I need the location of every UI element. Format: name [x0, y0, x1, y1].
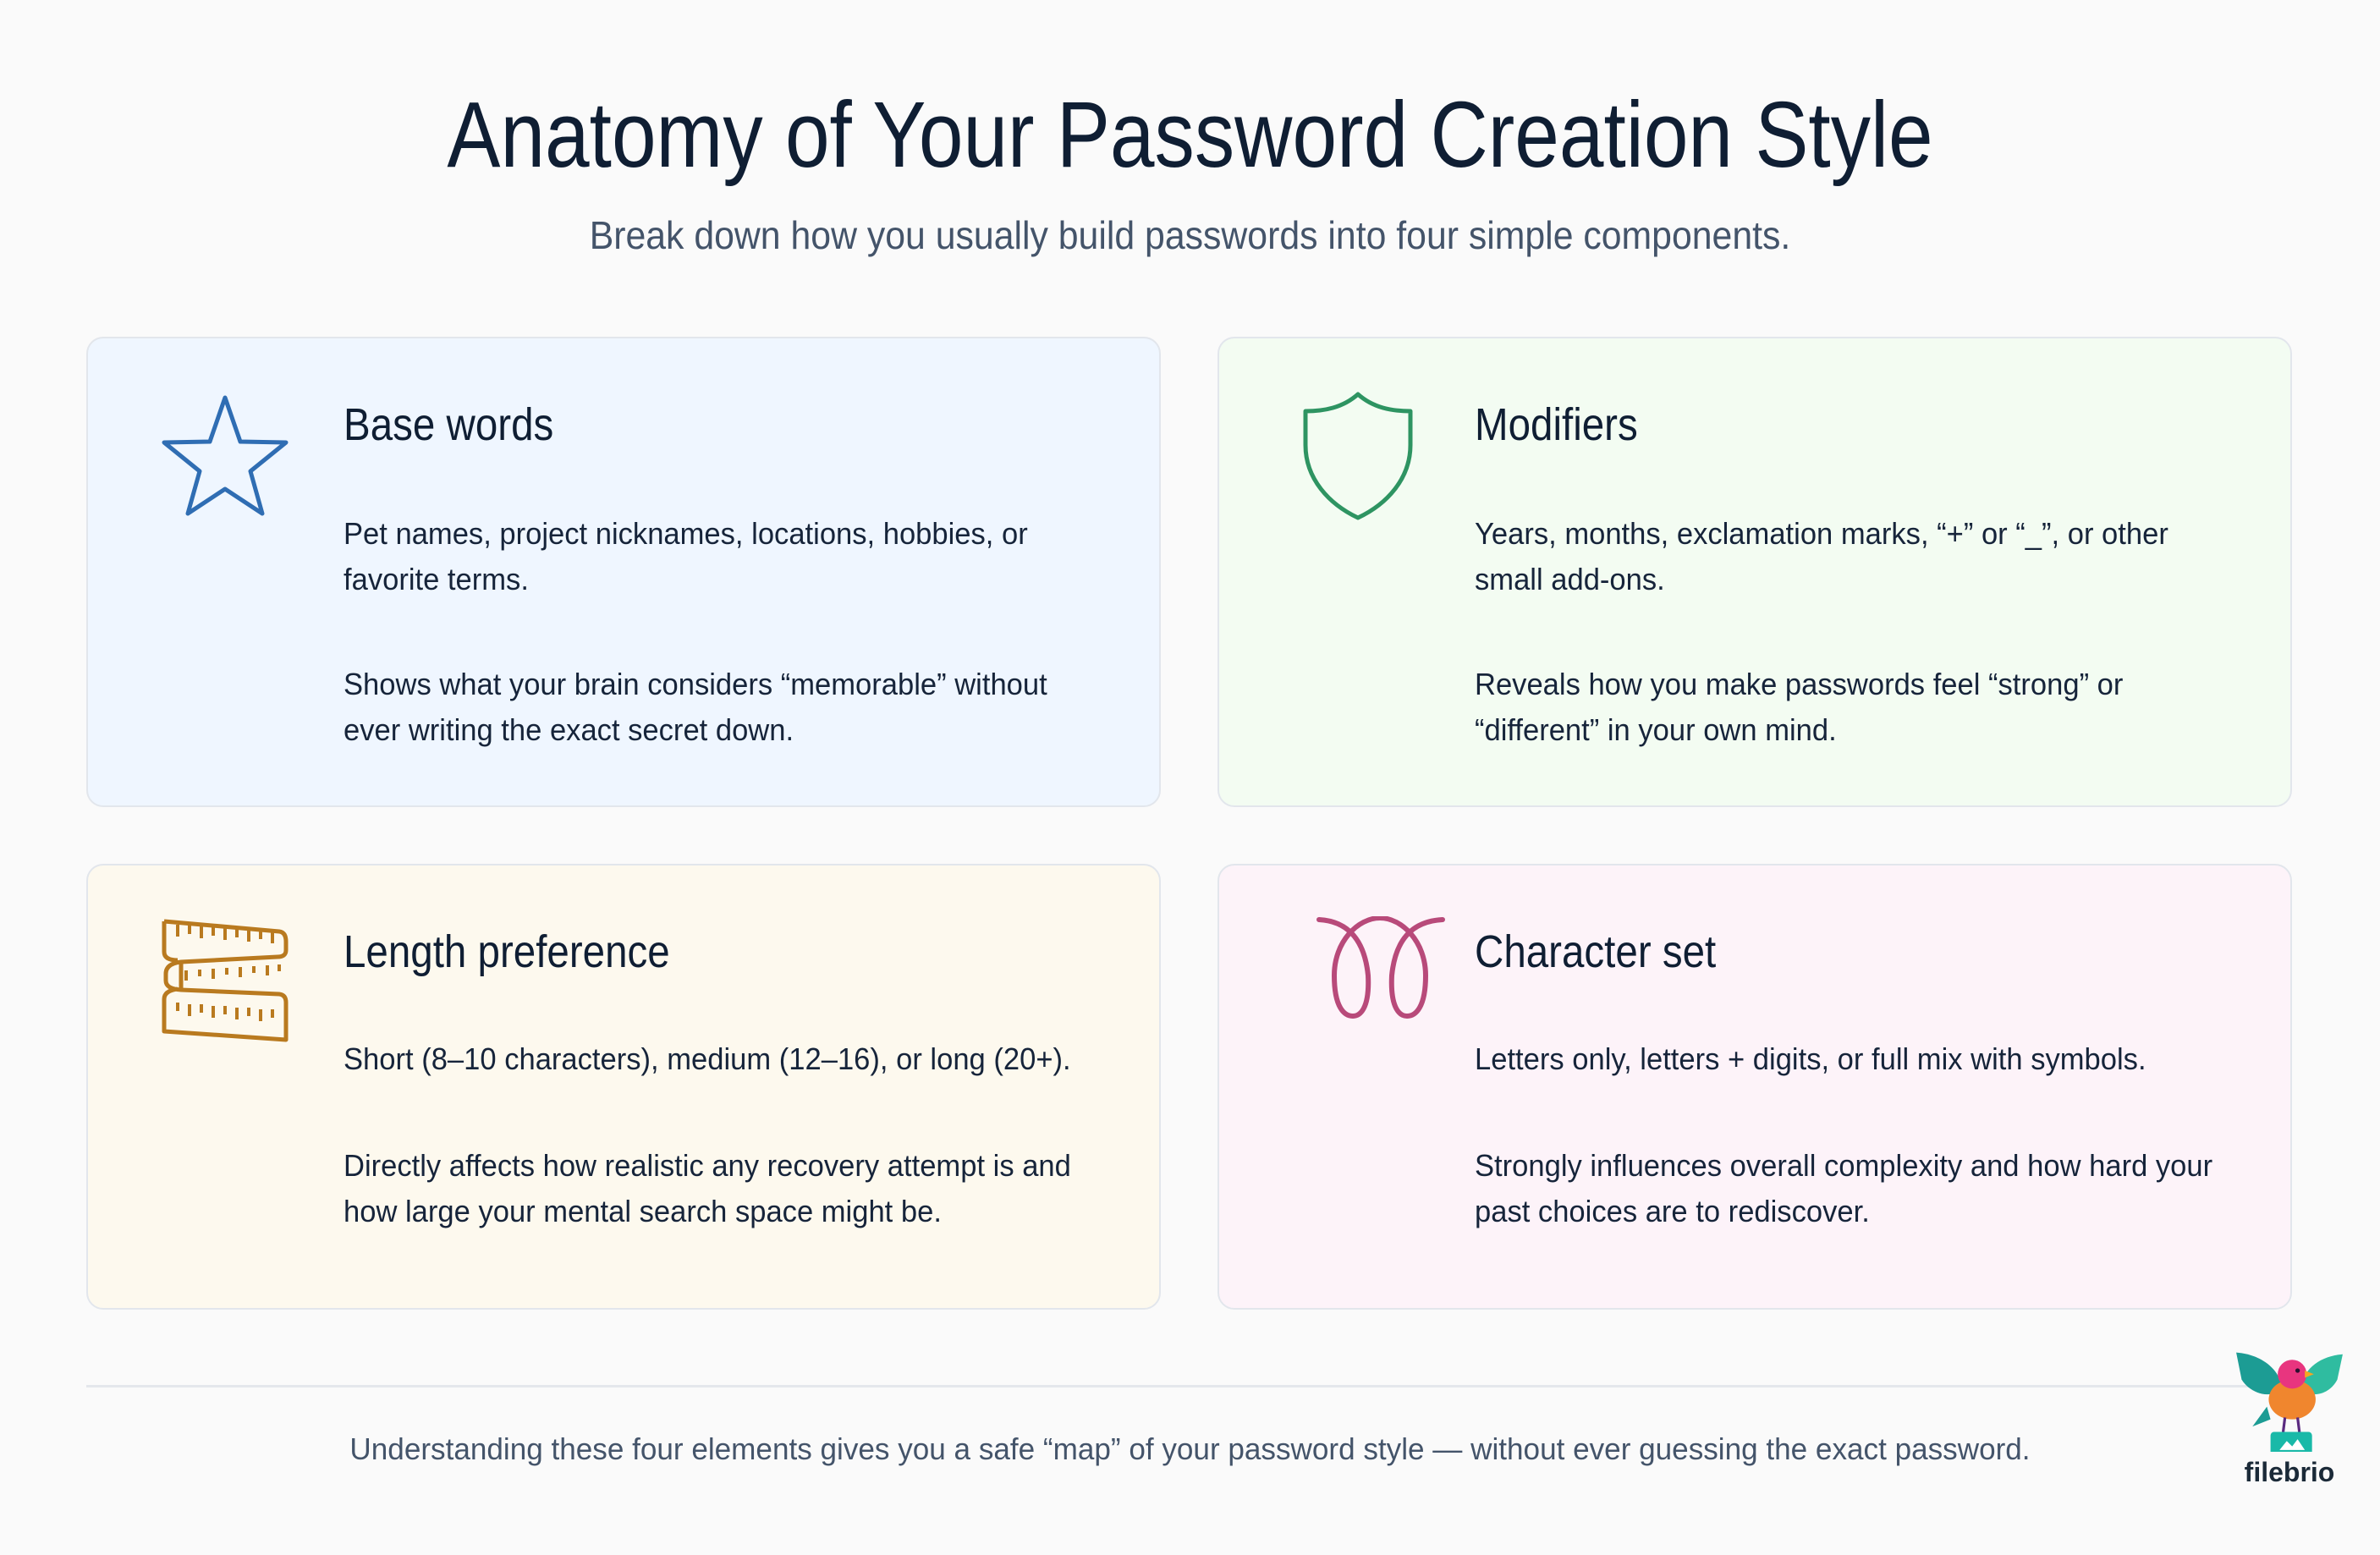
heading: Character set [1475, 926, 1716, 977]
title: Anatomy of Your Password Creation Style [447, 83, 1933, 187]
subtitle: Break down how you usually build passwords into four simple components. [590, 213, 1790, 257]
icon: tape measure [162, 919, 288, 1042]
text: Pet names, project nicknames, locations, hobbies, or [344, 516, 1028, 551]
text [1475, 1148, 2212, 1228]
icon: curls [1316, 916, 1445, 1019]
text: small add-ons. [1475, 562, 1665, 596]
text: Years, months, exclamation marks, “+” or “_”, or other [1475, 516, 2168, 551]
text [344, 1148, 1071, 1228]
text: past choices are to rediscover. [1475, 1194, 1870, 1228]
logo: filebrio: filebrio [2245, 1457, 2334, 1487]
heading: Base words [344, 399, 553, 450]
panel: length preference [86, 864, 1161, 1310]
logo: filebrio [2236, 1352, 2343, 1487]
text: Short (8–10 characters), medium (12–16), or long (20+). [344, 1041, 1071, 1076]
panel: modifiers [1217, 337, 2292, 807]
text [1475, 667, 2123, 747]
text [1475, 516, 2168, 596]
text: ever writing the exact secret down. [344, 712, 794, 747]
text [344, 667, 1047, 747]
text [344, 516, 1028, 596]
footer text: Understanding these four elements gives you a safe “map” of your password style — without ever guessing the exact password. [349, 1431, 2031, 1466]
icon: shield [1303, 392, 1413, 519]
text: Directly affects how realistic any recovery attempt is and [344, 1148, 1071, 1183]
panel: base words [86, 337, 1161, 807]
icon: star [162, 396, 288, 516]
text: “different” in your own mind. [1475, 712, 1837, 747]
text: Strongly influences overall complexity and how hard your [1475, 1148, 2212, 1183]
panel: character set [1217, 864, 2292, 1310]
text: Letters only, letters + digits, or full mix with symbols. [1475, 1041, 2146, 1076]
text: Reveals how you make passwords feel “strong” or [1475, 667, 2123, 701]
text: how large your mental search space might be. [344, 1194, 942, 1228]
heading: Length preference [344, 926, 670, 977]
text: Shows what your brain considers “memorable” without [344, 667, 1047, 701]
text: favorite terms. [344, 562, 529, 596]
heading: Modifiers [1475, 399, 1638, 450]
